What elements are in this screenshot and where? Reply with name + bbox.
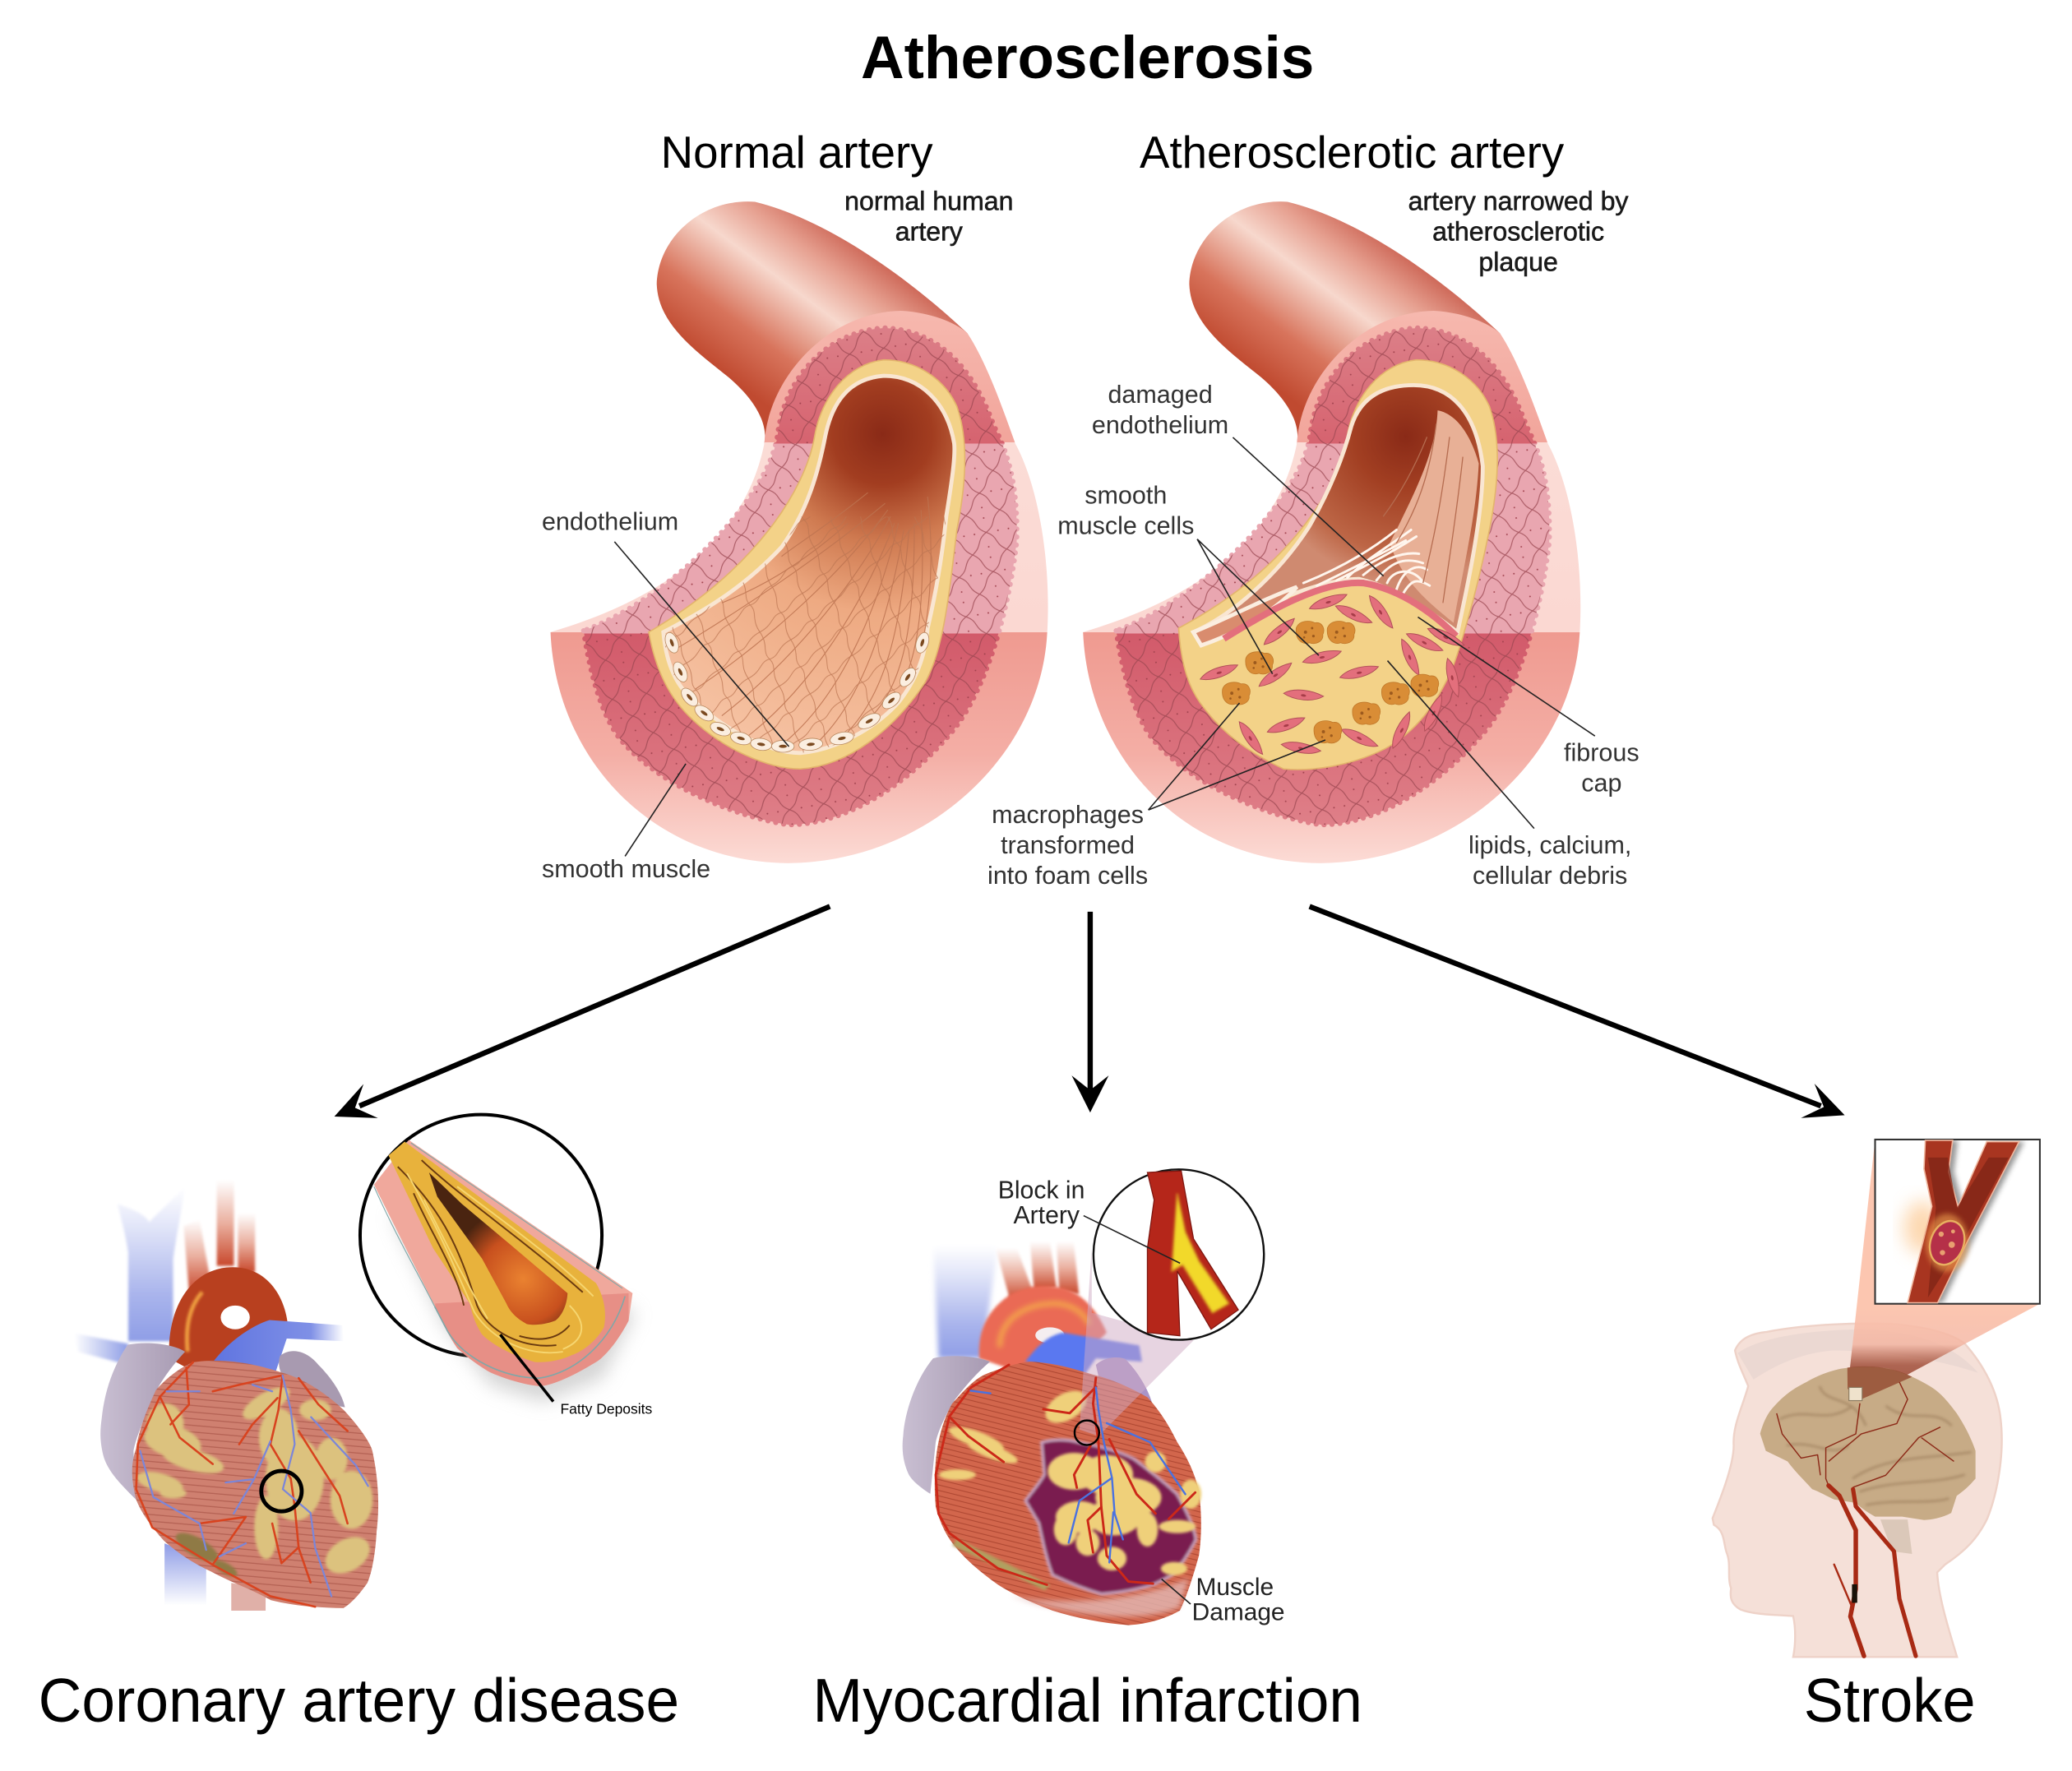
label: block in artery: Artery — [1013, 1202, 1080, 1229]
label: damaged endothelium — [1092, 381, 1384, 576]
label: smooth muscle — [542, 764, 710, 883]
endothelial folds — [665, 492, 946, 753]
panel: myocardial infarction illustration — [903, 1169, 1264, 1625]
label: damaged endothelium: endothelium — [1092, 411, 1228, 439]
aortic hole — [220, 1306, 250, 1329]
auricle — [1096, 1357, 1153, 1407]
inset circle — [1094, 1169, 1264, 1340]
heading: stroke: Stroke — [1804, 1666, 1976, 1735]
heading: coronary artery disease: Coronary artery disease — [39, 1666, 679, 1735]
inset box — [1875, 1140, 2040, 1304]
arrow: to stroke — [1310, 906, 1845, 1118]
inset artery — [1147, 1171, 1238, 1336]
cerebellum — [1880, 1519, 1912, 1554]
foam cells — [1223, 622, 1439, 743]
callout: normal human artery: artery — [895, 216, 963, 246]
coronary veins — [140, 1376, 368, 1596]
infarct damage zone — [1025, 1440, 1196, 1594]
inset artery section — [374, 1140, 632, 1386]
label: lipids, calcium, cellular debris: lipids, calcium, — [1468, 831, 1631, 859]
callout: normal human artery: normal human — [844, 187, 1014, 216]
magnification beam — [1848, 1140, 2040, 1399]
plaque body — [1178, 360, 1497, 770]
heading: normal artery: Normal artery — [661, 127, 933, 178]
aortic hole — [1035, 1327, 1065, 1343]
translucent head — [1713, 1324, 2002, 1657]
label: damaged endothelium: damaged — [1108, 381, 1213, 409]
label: muscle damage: Damage — [1192, 1598, 1285, 1625]
label: macrophages transformed into foam cells: macrophages — [992, 801, 1144, 829]
label: block in artery — [998, 1177, 1180, 1263]
aorta — [979, 1286, 1107, 1374]
title: Atherosclerosis — [861, 25, 1314, 91]
panel: coronary artery disease illustration — [74, 1115, 636, 1611]
atrium — [100, 1343, 185, 1500]
label: smooth muscle cells: smooth — [1085, 481, 1167, 509]
marker circle — [1075, 1421, 1099, 1445]
panel: normal artery illustration — [551, 201, 1048, 863]
pulmonary trunk — [1025, 1333, 1142, 1375]
arrow: to coronary artery disease — [335, 906, 830, 1118]
label: block in artery: Block in — [998, 1177, 1085, 1205]
auricle — [279, 1351, 345, 1408]
label: muscle damage: Muscle — [1196, 1574, 1274, 1601]
label: macrophages transformed into foam cells: transformed — [1001, 831, 1135, 859]
pale magnification beam — [1080, 1248, 1194, 1436]
smooth muscle cells — [1199, 592, 1465, 758]
panel: atherosclerotic artery illustration — [1083, 201, 1580, 863]
arrow: to myocardial infarction — [1071, 912, 1108, 1112]
marker square — [1849, 1387, 1862, 1401]
aorta — [169, 1267, 288, 1378]
marker circle — [261, 1471, 302, 1511]
heart body — [935, 1362, 1201, 1625]
heading: myocardial infarction: Myocardial infarction — [812, 1666, 1362, 1735]
fat deposits — [939, 1385, 1201, 1590]
fibrous cap — [1223, 583, 1456, 639]
top of brain shaded by beam — [1848, 1366, 1912, 1399]
label: smooth muscle: smooth muscle — [542, 855, 710, 883]
callout: artery narrowed by atherosclerotic plaque: atherosclerotic — [1432, 216, 1604, 246]
callout: artery narrowed by atherosclerotic plaque — [1408, 187, 1629, 276]
brain — [1760, 1366, 1976, 1520]
endothelial cells — [663, 631, 932, 752]
callout: normal human artery — [844, 187, 1014, 246]
cerebral vessels — [1777, 1382, 1954, 1487]
cone shadow — [391, 1213, 636, 1402]
label: macrophages transformed into foam cells — [987, 703, 1325, 890]
hair highlight — [1737, 1329, 1978, 1380]
label: fibrous cap — [1418, 617, 1640, 798]
label: fibrous cap: fibrous — [1564, 739, 1640, 767]
label: smooth muscle cells — [1057, 481, 1319, 674]
fatty inner layer — [649, 360, 964, 769]
label: macrophages transformed into foam cells: into foam cells — [987, 862, 1148, 890]
damaged endothelium strands — [1303, 410, 1479, 623]
heading: atherosclerotic artery: Atherosclerotic artery — [1140, 127, 1565, 178]
label: endothelium — [542, 507, 789, 747]
atrium — [903, 1356, 990, 1494]
coronary arteries — [936, 1365, 1196, 1585]
label: fatty deposits: Fatty Deposits — [560, 1401, 653, 1417]
fat deposits — [135, 1381, 376, 1581]
inset circle — [360, 1115, 602, 1357]
plaque in inset artery — [1172, 1194, 1228, 1313]
pulmonary trunk — [213, 1320, 344, 1374]
label: lipids, calcium, cellular debris — [1387, 661, 1631, 890]
lumen — [664, 376, 955, 753]
callout: artery narrowed by atherosclerotic plaque: plaque — [1478, 247, 1558, 276]
endothelium tail — [1193, 587, 1297, 645]
coronary veins — [970, 1387, 1186, 1562]
lower soft shading — [1011, 1579, 1189, 1616]
label: lipids, calcium, cellular debris: cellular debris — [1473, 862, 1627, 890]
heart body — [132, 1361, 378, 1608]
heart vessels behind — [74, 1180, 266, 1611]
brain folds — [1780, 1386, 1972, 1505]
narrowed lumen — [1193, 385, 1482, 632]
panel: stroke illustration — [1713, 1140, 2040, 1657]
superior vena cava — [933, 1246, 998, 1358]
coronary arteries — [136, 1362, 348, 1607]
leader line: fatty deposits — [500, 1334, 553, 1402]
label: smooth muscle cells: muscle cells — [1057, 511, 1194, 539]
carotid arteries — [1829, 1486, 1916, 1656]
inset artery contents — [1904, 1140, 2024, 1303]
aortic highlight — [1000, 1303, 1089, 1347]
carotid plaque — [1852, 1584, 1857, 1602]
upper arteries — [996, 1242, 1079, 1301]
callout: artery narrowed by atherosclerotic plaque: artery narrowed by — [1408, 187, 1629, 216]
label: endothelium: endothelium — [542, 507, 678, 535]
label: muscle damage — [1162, 1574, 1285, 1625]
label: fibrous cap: cap — [1581, 770, 1621, 798]
aortic highlight — [187, 1292, 202, 1352]
